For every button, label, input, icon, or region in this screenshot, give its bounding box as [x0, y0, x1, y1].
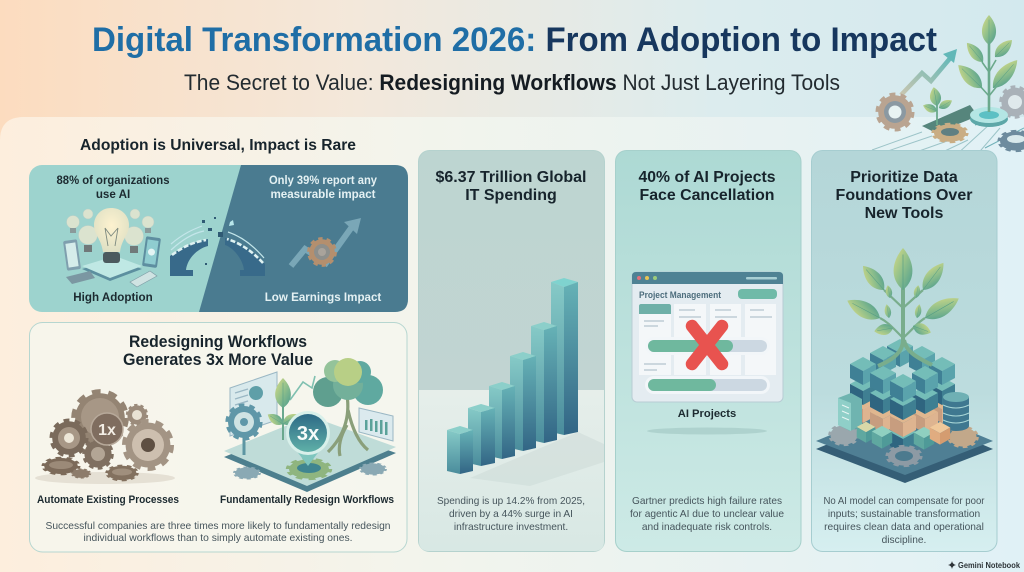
gear left: [228, 406, 260, 455]
panel: IT spending: [418, 150, 604, 552]
section heading: adoption: Adoption is Universal, Impact is Rare: [80, 137, 356, 154]
tree leaves: [844, 248, 963, 338]
side gears: [830, 425, 977, 447]
content backdrop: [0, 117, 1024, 572]
header illustration: plant, gears and growth arrow: [872, 15, 1024, 158]
inner right column: [912, 366, 938, 433]
heading: Prioritize Data: [850, 169, 958, 186]
back tiles: [870, 339, 935, 374]
inner left column: [870, 366, 896, 433]
badge 3x: 3x: [297, 423, 319, 445]
heading: $6.37 Trillion Global: [436, 169, 586, 186]
panel background: [812, 150, 997, 552]
icon: circuit traces: [872, 112, 1024, 158]
panel floor: [419, 390, 604, 551]
heading: [436, 169, 586, 204]
icon: broken bridge: [170, 217, 265, 276]
front blocks: [857, 422, 950, 450]
text: 39 percent: Only 39% report any: [269, 174, 378, 187]
title: Digital Transformation 2026: From Adoption to Impact: [92, 21, 937, 59]
heading: 40% of AI Projects: [638, 169, 776, 186]
icon: light bulbs and devices: [63, 208, 161, 287]
gear right: [125, 422, 171, 468]
icon: circuit board: [922, 105, 978, 133]
gear small top: [127, 405, 147, 425]
heading: [638, 169, 776, 204]
illustration: tree on data blocks: [816, 248, 993, 483]
description: and inadequate risk controls.: [642, 522, 772, 533]
right column: [929, 357, 955, 423]
trend arrow: [291, 218, 361, 266]
gear left: [52, 421, 86, 455]
description: [437, 496, 585, 533]
description: requires clean data and operational: [824, 522, 984, 533]
panel background: [418, 150, 604, 552]
progress bar two: [645, 376, 770, 394]
heading: [123, 333, 313, 369]
front gear: [888, 446, 920, 466]
text: high adoption: High Adoption: [73, 291, 153, 304]
description: [630, 496, 784, 533]
gear back: [75, 393, 125, 443]
server rack: [838, 393, 862, 431]
icon: small sprout: [922, 86, 954, 125]
gear flat right: [361, 463, 385, 475]
bar 3: [489, 382, 515, 459]
badge 1x: 1x: [98, 422, 116, 439]
badge 3x: [286, 411, 330, 466]
platform: [224, 416, 396, 492]
panel: adoption versus impact: [29, 165, 408, 312]
center column: [890, 374, 916, 453]
icon: phone right: [142, 236, 161, 268]
icon: large sprout: [953, 15, 1023, 112]
heading: [836, 169, 972, 222]
heading: Redesigning Workflows: [129, 333, 307, 351]
illustration: project window: [632, 272, 783, 402]
base plate: [816, 404, 993, 483]
left column: [850, 357, 876, 423]
columns: [639, 304, 776, 375]
description: Gartner predicts high failure rates: [632, 496, 782, 507]
right bridge span: [225, 232, 265, 276]
panel right half: [199, 165, 408, 312]
gear flat left: [235, 467, 259, 479]
icon: blue gear: [1000, 131, 1024, 151]
label: AI Projects: [678, 408, 736, 420]
panel background: [616, 150, 801, 552]
progress bar one: [645, 337, 770, 355]
icon: large grey gear: [878, 95, 912, 129]
subtitle: The Secret to Value: Redesigning Workflows Not Just Layering Tools: [184, 70, 840, 95]
description: No AI model can compensate for poor: [824, 496, 985, 507]
panel frame: [30, 322, 407, 552]
description: discipline.: [882, 535, 926, 546]
gear flat left: [44, 458, 78, 474]
label: redesign: Fundamentally Redesign Workflows: [220, 494, 394, 506]
window dots: [637, 276, 657, 280]
label: automate: Automate Existing Processes: [37, 494, 179, 506]
panel: project cancellation: [616, 150, 801, 552]
description: for agentic AI due to unclear value: [630, 509, 784, 520]
icon: tablet left: [63, 239, 81, 271]
gear flat right: [107, 466, 137, 480]
description: Spending is up 14.2% from 2025,: [437, 496, 585, 507]
icon: right grey gear: [1001, 87, 1024, 117]
title bar: [632, 272, 783, 284]
panel: workflow redesign: [30, 322, 407, 552]
icon: main bulb: [94, 208, 129, 263]
description: Successful companies are three times more likely to fundamentally redesign: [46, 521, 390, 532]
bar 5: [531, 322, 557, 443]
window title: Project Management: [639, 290, 721, 300]
text: 88 percent: [56, 174, 170, 201]
bar 6: [551, 278, 578, 435]
icon: keyboard: [66, 271, 95, 284]
icon: small bulbs: [66, 209, 154, 253]
icon: glowing disc: [970, 107, 1008, 127]
icon: platform: [82, 256, 142, 281]
icon: growth arrow: [901, 49, 957, 95]
database cylinder: [943, 392, 969, 431]
chart: growth bars: [447, 278, 604, 486]
sapling: [265, 378, 301, 440]
text: low earnings impact: Low Earnings Impact: [265, 291, 381, 304]
description: [824, 496, 985, 546]
tree: [313, 358, 383, 456]
left bridge span: [170, 226, 208, 276]
bar 1: [447, 426, 473, 474]
arrow: [290, 376, 315, 400]
description: [46, 521, 390, 544]
gear flat small: [72, 469, 90, 478]
gear bottom: [288, 459, 330, 479]
text: 39 percent: [269, 174, 378, 201]
text: 88 percent: 88% of organizations: [56, 174, 170, 187]
window frame: [632, 272, 783, 402]
panel left half: [29, 165, 408, 312]
icon: tablet flat: [130, 271, 157, 287]
panel: data foundations: [812, 150, 997, 552]
heading: Generates 3x More Value: [123, 351, 313, 369]
description: inputs; sustainable transformation: [828, 509, 980, 520]
icon: gear with arrow: [291, 218, 361, 266]
description: driven by a 44% surge in AI: [449, 509, 573, 520]
description: infrastructure investment.: [454, 522, 568, 533]
data cubes: [850, 339, 955, 453]
tree trunk and branches: [878, 288, 932, 366]
heading: Foundations Over: [836, 187, 972, 204]
icon: tan gear: [934, 124, 966, 142]
description: individual workflows than to simply automate existing ones.: [84, 533, 352, 544]
debris: [202, 217, 234, 265]
small gear: [309, 239, 335, 265]
shadow: [647, 428, 767, 434]
browser window: [230, 372, 277, 436]
heading: Face Cancellation: [640, 187, 774, 204]
text: 39 percent: measurable impact: [270, 188, 376, 201]
gear center: [84, 440, 112, 468]
illustration: redesign platform 3x: [224, 358, 396, 492]
bar 4: [510, 352, 536, 451]
text: 88 percent: use AI: [96, 188, 130, 201]
heading: New Tools: [865, 205, 944, 222]
bar 2: [468, 404, 495, 466]
button: [738, 289, 777, 299]
illustration: brown gears 1x: [35, 393, 175, 484]
heading: IT Spending: [465, 187, 557, 204]
chart card: [359, 408, 393, 441]
icon: red cross: [692, 326, 722, 364]
